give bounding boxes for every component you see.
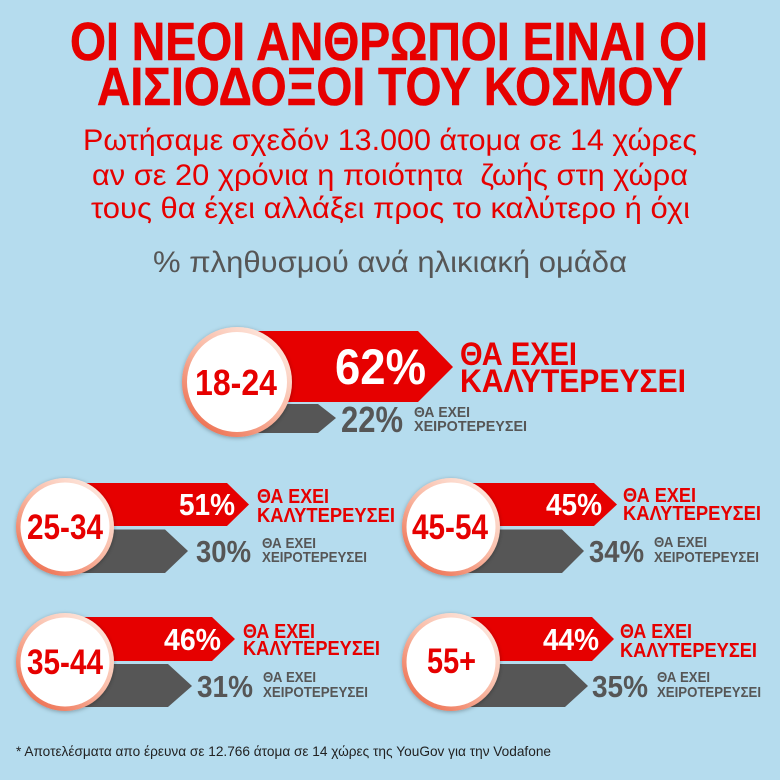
age badge 35-44: 35-44 — [27, 643, 103, 682]
value 22%: 22% — [341, 399, 403, 440]
age badge 45-54 — [402, 478, 500, 576]
arrow: worse 35% — [456, 664, 588, 707]
label worse: ΘΑ ΕΧΕΙ — [654, 534, 707, 551]
label better: ΘΑ ΕΧΕΙ — [623, 485, 696, 507]
value 35%: 35% — [592, 669, 648, 704]
panel: age 45-54 — [402, 478, 761, 576]
subtitle — [83, 124, 697, 225]
label better: ΚΑΛΥΤΕΡΕΥΣΕΙ — [243, 638, 380, 660]
age badge 45-54: 45-54 — [412, 508, 488, 547]
footnote: * Αποτελέσματα απο έρευνα σε 12.766 άτομα σε 14 χώρες της YouGov για την Vodafone — [16, 743, 551, 759]
label worse: ΧΕΙΡΟΤΕΡΕΥΣΕΙ — [262, 549, 367, 566]
title: ΑΙΣΙΟΔΟΞΟΙ ΤΟΥ ΚΟΣΜΟΥ — [97, 57, 683, 117]
panel: age 18-24 — [182, 327, 686, 440]
label better: ΚΑΛΥΤΕΡΕΥΣΕΙ — [623, 503, 761, 525]
arrow: better 45% — [456, 483, 617, 526]
arrow: better 51% — [70, 483, 249, 526]
label worse: ΧΕΙΡΟΤΕΡΕΥΣΕΙ — [414, 418, 527, 435]
arrow: better 46% — [70, 617, 235, 661]
value 44%: 44% — [543, 622, 599, 657]
label better: ΚΑΛΥΤΕΡΕΥΣΕΙ — [620, 640, 757, 662]
age badge 18-24: 18-24 — [195, 362, 277, 403]
age badge 25-34 — [16, 478, 114, 576]
label better: ΘΑ ΕΧΕΙ — [620, 621, 692, 643]
age badge 55+: 55+ — [427, 642, 476, 681]
arrow: better 44% — [456, 617, 614, 661]
label better — [460, 336, 686, 399]
subtitle: τους θα έχει αλλάξει προς το καλύτερο ή όχι — [91, 192, 690, 225]
chart subtitle: % πληθυσμού ανά ηλικιακή ομάδα — [153, 246, 627, 279]
label better: ΚΑΛΥΤΕΡΕΥΣΕΙ — [460, 363, 686, 399]
age badge 25-34: 25-34 — [27, 508, 103, 547]
subtitle: αν σε 20 χρόνια η ποιότητα ζωής στη χώρα — [92, 159, 688, 192]
value 34%: 34% — [589, 534, 644, 569]
label worse — [654, 534, 759, 566]
value 62%: 62% — [335, 339, 426, 395]
title — [70, 12, 708, 117]
label worse — [262, 535, 367, 566]
label better — [257, 486, 395, 527]
age badge 55+ — [402, 613, 500, 711]
label worse: ΘΑ ΕΧΕΙ — [414, 404, 470, 421]
label worse: ΘΑ ΕΧΕΙ — [262, 535, 316, 552]
label worse — [414, 404, 527, 435]
label worse — [657, 669, 761, 701]
panel: age 55+ — [402, 613, 761, 711]
label worse: ΧΕΙΡΟΤΕΡΕΥΣΕΙ — [657, 684, 761, 701]
age badge 35-44 — [16, 613, 114, 711]
label worse: ΘΑ ΕΧΕΙ — [263, 669, 316, 686]
value 46%: 46% — [164, 622, 221, 657]
label worse: ΧΕΙΡΟΤΕΡΕΥΣΕΙ — [654, 549, 759, 566]
label better — [243, 621, 380, 660]
label better: ΚΑΛΥΤΕΡΕΥΣΕΙ — [257, 505, 395, 527]
subtitle: Ρωτήσαμε σχεδόν 13.000 άτομα σε 14 χώρες — [83, 124, 697, 157]
value 31%: 31% — [197, 669, 253, 704]
label better: ΘΑ ΕΧΕΙ — [460, 336, 577, 372]
label better: ΘΑ ΕΧΕΙ — [257, 486, 329, 508]
arrow: worse 30% — [70, 530, 188, 573]
age badge 18-24 — [182, 327, 292, 437]
arrow: worse 31% — [70, 664, 192, 707]
arrow: worse 34% — [456, 530, 584, 573]
value 30%: 30% — [196, 534, 251, 569]
value 45%: 45% — [546, 487, 602, 522]
label worse: ΘΑ ΕΧΕΙ — [657, 669, 710, 686]
panel: age 35-44 — [16, 613, 380, 711]
label worse: ΧΕΙΡΟΤΕΡΕΥΣΕΙ — [263, 684, 368, 701]
value 51%: 51% — [179, 487, 235, 522]
arrow: worse 22% — [240, 404, 336, 433]
label better: ΘΑ ΕΧΕΙ — [243, 621, 315, 643]
label better — [623, 485, 761, 525]
panel: age 25-34 — [16, 478, 395, 576]
arrow: better 62% — [240, 331, 453, 402]
label worse — [263, 669, 368, 701]
label better — [620, 621, 757, 662]
